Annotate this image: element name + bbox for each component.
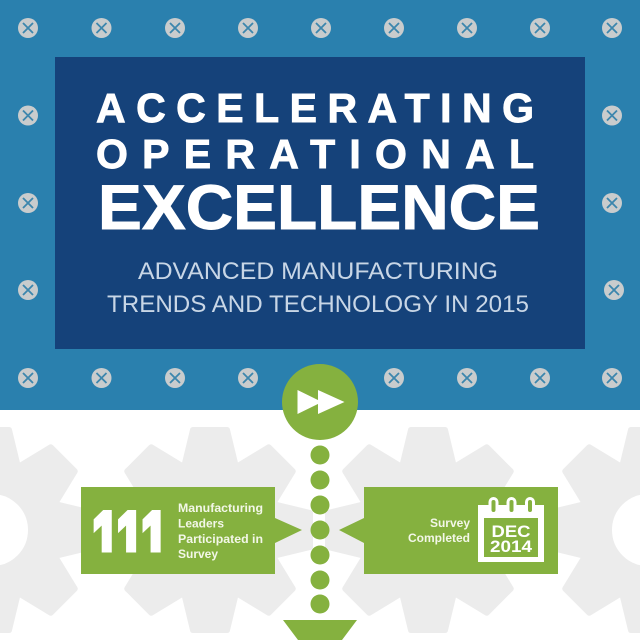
- participants text: Participated in: [178, 532, 263, 546]
- participants text: Survey: [178, 547, 218, 561]
- completed text: [408, 516, 470, 545]
- completed text: Survey: [430, 516, 470, 530]
- icon: calendar: [478, 498, 544, 562]
- completed text: Completed: [408, 531, 470, 545]
- callout: survey participants: [81, 487, 302, 579]
- callout: survey completed: [339, 487, 558, 574]
- icon: calendar: DEC: [492, 522, 530, 541]
- title: OPERATIONAL: [96, 131, 534, 177]
- icon: calendar: 2014: [490, 537, 533, 556]
- icon: fast forward: [282, 364, 358, 440]
- background gears: [0, 430, 640, 630]
- bottom arrow: [283, 620, 357, 640]
- title: EXCELLENCE: [98, 173, 540, 243]
- rivets: [18, 18, 624, 388]
- title panel: [55, 57, 585, 349]
- title: ACCELERATING: [96, 85, 534, 131]
- participants text: Leaders: [178, 516, 224, 530]
- participants text: [178, 501, 263, 561]
- subtitle: ADVANCED MANUFACTURING: [138, 258, 498, 285]
- title: [96, 85, 540, 243]
- participants text: Manufacturing: [178, 501, 263, 515]
- timeline connector: [310, 446, 330, 614]
- number: 111: 111: [92, 498, 168, 579]
- subtitle: TRENDS AND TECHNOLOGY IN 2015: [107, 291, 529, 318]
- subtitle: [107, 258, 529, 318]
- header band: [0, 0, 640, 410]
